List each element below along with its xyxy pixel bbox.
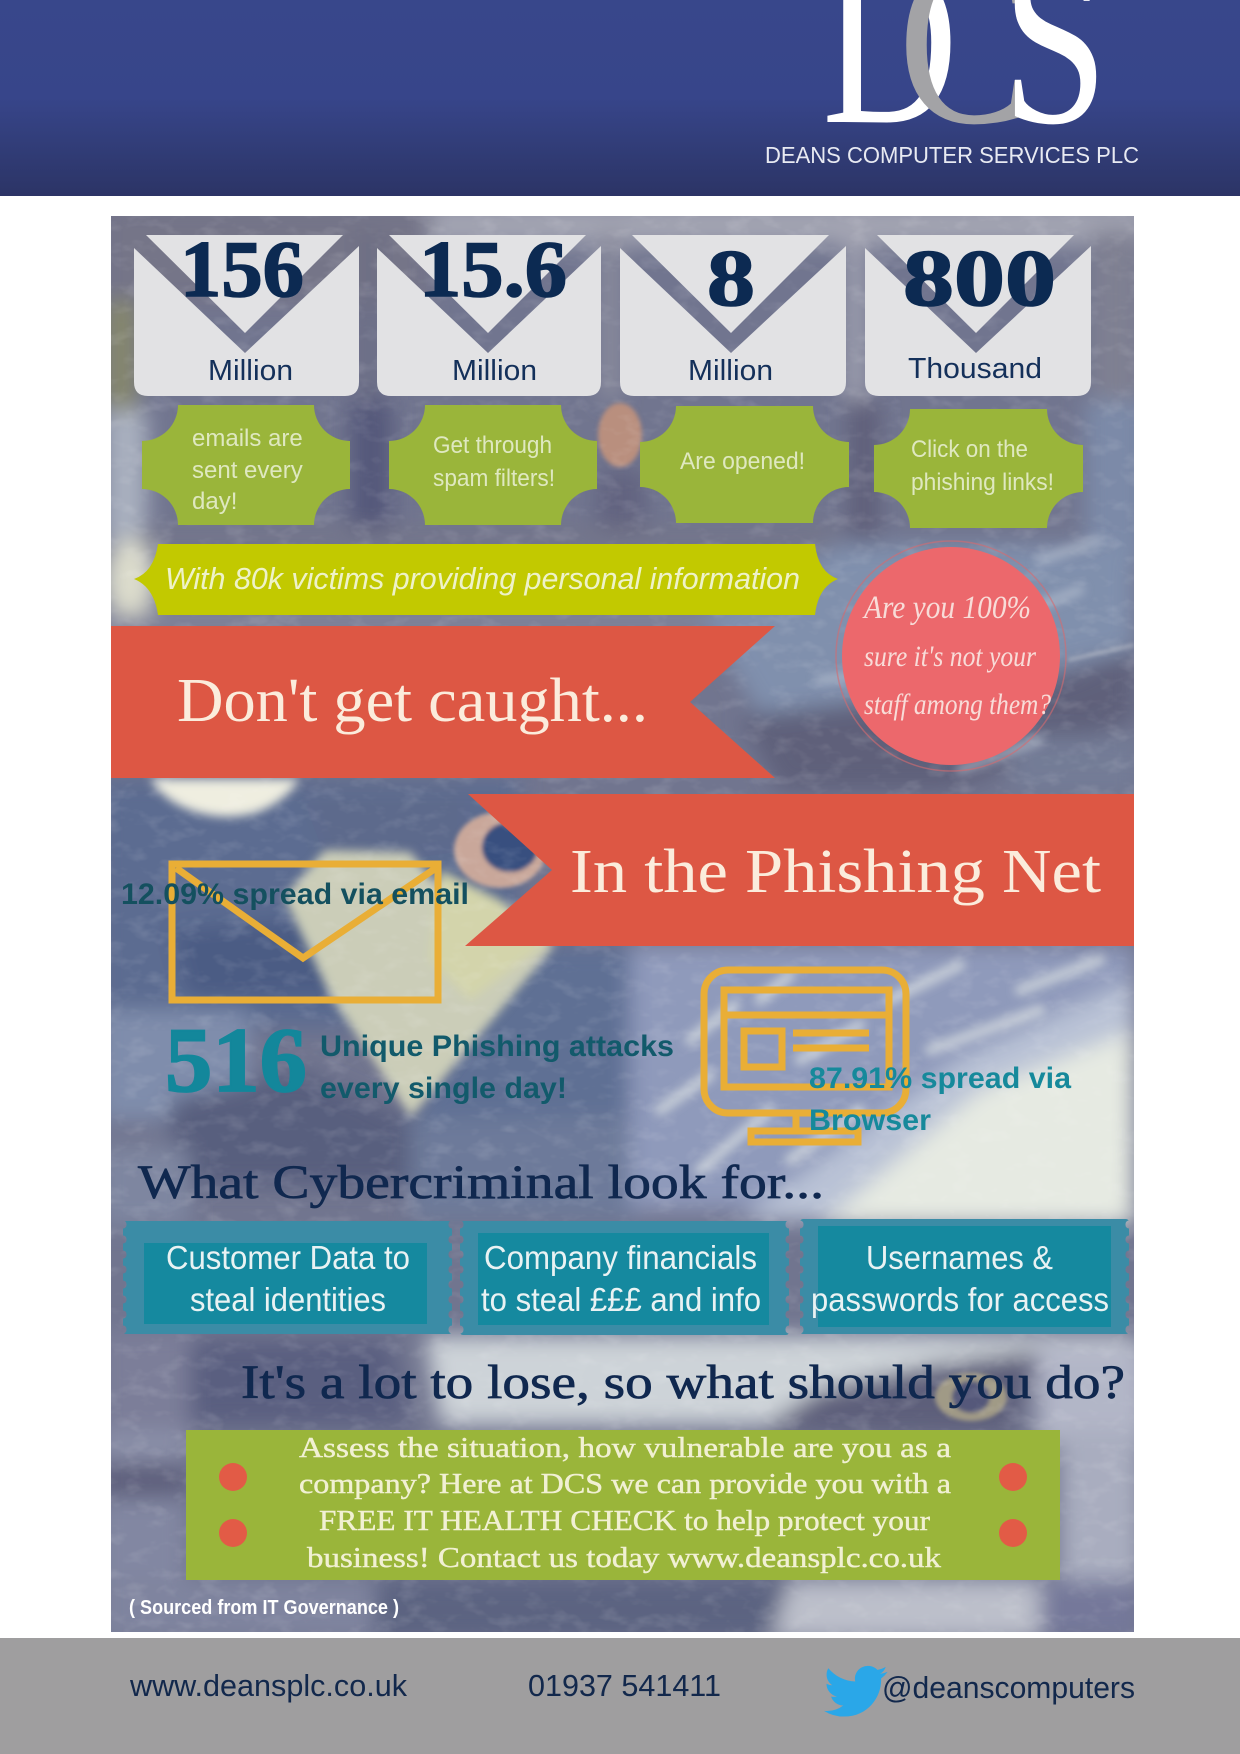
icon: browser monitor [704, 970, 906, 1142]
ticket: company financials: Company financials [484, 1239, 757, 1276]
call to action text: company? Here at DCS we can provide you with a [299, 1469, 952, 1500]
card: 800 Thousand: 800 [903, 235, 1056, 323]
stat: 516 unique attacks [165, 1009, 674, 1111]
ticket: usernames and passwords [800, 1219, 1129, 1334]
source note: ( Sourced from IT Governance ) [129, 1597, 399, 1619]
ticket: emails sent: emails are [192, 425, 303, 452]
phone: 01937 541411 [528, 1668, 721, 1703]
card: 156 Million: Million [208, 355, 293, 387]
ticket: opened: Are opened! [680, 448, 805, 475]
icon: envelope [172, 864, 438, 1000]
ribbon: Don't get caught: Don't get caught... [177, 667, 648, 735]
callout: red circle question: staff among them? [864, 688, 1051, 721]
callout: red circle question [836, 541, 1066, 771]
tickets: what criminals look for [123, 1219, 1129, 1335]
green tickets row [142, 405, 1083, 528]
ribbon: In the Phishing Net [465, 794, 1134, 946]
company name: DEANS COMPUTER SERVICES PLC [765, 142, 1139, 168]
ticket: spam filters: spam filters! [433, 465, 555, 492]
call to action text: business! Contact us today www.deansplc.co.uk [307, 1543, 941, 1574]
call to action text: FREE IT HEALTH CHECK to help protect your [319, 1506, 931, 1537]
ticket: opened [640, 406, 849, 523]
text: 87.91% via browser: 87.91% spread via [809, 1062, 1071, 1095]
ticket: customer data [123, 1221, 452, 1334]
card: 156 Million: 156 [180, 226, 304, 314]
stat: 516 unique attacks: 516 [165, 1009, 307, 1111]
card: 800 Thousand [865, 235, 1091, 396]
callout: red circle question: Are you 100% [862, 590, 1031, 626]
banner: 80k victims [134, 544, 838, 615]
card: 8 Million [620, 235, 846, 396]
call to action text: Assess the situation, how vulnerable are you as a [299, 1433, 952, 1464]
ticket: emails sent: sent every [192, 457, 303, 484]
ribbon: In the Phishing Net: In the Phishing Net [570, 838, 1101, 906]
card: 15.6 Million [377, 226, 601, 396]
stat: 516 unique attacks: every single day! [320, 1072, 567, 1105]
ticket: company financials [460, 1221, 789, 1335]
website: www.deansplc.co.uk [129, 1668, 407, 1703]
text: 87.91% via browser: Browser [809, 1104, 931, 1137]
ticket: spam filters [389, 405, 597, 525]
heading: What Cybercriminal look for: What Cybercriminal look for... [138, 1156, 824, 1209]
card: 15.6 Million: 15.6 [419, 226, 567, 314]
card: 15.6 Million: Million [452, 355, 537, 387]
ticket: phishing links: Click on the [911, 436, 1028, 463]
ticket: customer data: steal identities [190, 1281, 386, 1318]
card: 156 Million [134, 226, 359, 396]
panel: fish photo background [100, 205, 1150, 1640]
envelope stats row [134, 226, 1091, 396]
icon: twitter bird [824, 1666, 888, 1717]
callout: red circle question: sure it's not your [864, 640, 1036, 673]
ticket: customer data: Customer Data to [166, 1239, 410, 1276]
panel: call to action [186, 1430, 1060, 1580]
ticket: usernames and passwords: passwords for access [811, 1281, 1109, 1318]
heading: what should you do: It's a lot to lose, so what should you do? [241, 1356, 1125, 1409]
twitter handle: @deanscomputers [882, 1670, 1135, 1705]
text: 12.09% via email: 12.09% spread via email [121, 878, 469, 911]
footer band [0, 1638, 1240, 1754]
ticket: phishing links [874, 409, 1083, 528]
ticket: company financials: to steal £££ and info [481, 1281, 761, 1318]
ticket: usernames and passwords: Usernames & [866, 1239, 1053, 1276]
DCS logo [827, 0, 1096, 124]
ticket: emails sent [142, 405, 350, 525]
call to action text [299, 1433, 952, 1574]
header band [0, 0, 1240, 196]
card: 8 Million: 8 [707, 235, 755, 323]
banner: 80k victims: With 80k victims providing personal information [165, 561, 800, 596]
ticket: phishing links: phishing links! [911, 469, 1054, 496]
card: 800 Thousand: Thousand [908, 353, 1042, 385]
card: 8 Million: Million [688, 355, 773, 387]
text: 87.91% via browser [809, 1062, 1071, 1137]
ticket: spam filters: Get through [433, 432, 552, 459]
ribbon: Don't get caught [111, 626, 775, 778]
stat: 516 unique attacks: Unique Phishing attacks [320, 1030, 674, 1063]
ticket: emails sent: day! [192, 488, 237, 515]
bullet dots [219, 1463, 1027, 1547]
